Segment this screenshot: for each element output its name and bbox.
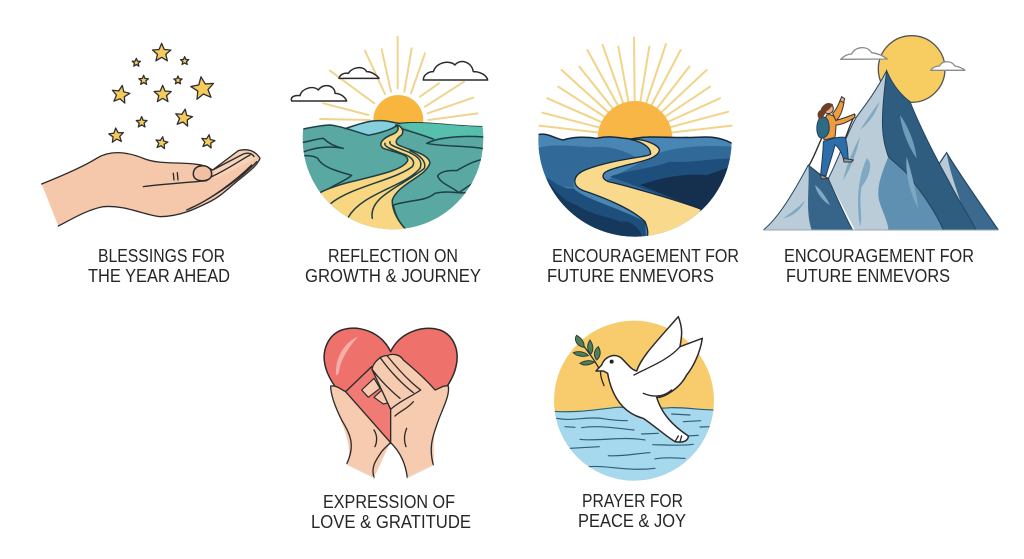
main peak xyxy=(828,71,976,230)
label: ENCOURAGEMENT FOR xyxy=(552,246,739,266)
panel: encouragement for future endeavors (climber) xyxy=(763,36,998,286)
right hand xyxy=(372,354,449,478)
clouds xyxy=(291,62,488,101)
sun xyxy=(373,95,423,145)
label: EXPRESSION OF xyxy=(323,492,455,512)
centre heart panel xyxy=(346,367,391,443)
left hand xyxy=(331,386,391,478)
label: FUTURE ENMEVORS xyxy=(786,266,950,286)
sun disc xyxy=(554,321,714,481)
icon: climber on mountain xyxy=(763,36,998,230)
label: REFLECTION ON xyxy=(328,246,458,266)
front peak xyxy=(763,165,998,230)
label xyxy=(547,246,739,286)
dove xyxy=(596,317,702,442)
label xyxy=(311,492,471,532)
winding road xyxy=(318,125,430,233)
label: PRAYER FOR xyxy=(582,491,683,511)
highlight xyxy=(336,337,358,375)
landscape xyxy=(298,121,488,233)
icon: hands holding heart xyxy=(324,328,457,478)
sun xyxy=(598,101,672,176)
label: ENCOURAGEMENT FOR xyxy=(784,246,974,266)
label: PEACE & JOY xyxy=(578,511,686,531)
climber xyxy=(809,97,855,179)
stars xyxy=(108,43,216,149)
sun rays xyxy=(320,37,478,120)
inner fingers xyxy=(362,378,389,404)
label xyxy=(578,491,686,531)
river landscape xyxy=(537,134,733,243)
clouds xyxy=(841,48,965,70)
back peak xyxy=(937,153,998,230)
hand xyxy=(42,150,260,226)
label: BLESSINGS FOR xyxy=(98,246,225,266)
label: LOVE & GRATITUDE xyxy=(311,512,471,532)
sun rays xyxy=(539,37,732,133)
water xyxy=(554,406,714,481)
label xyxy=(305,246,481,286)
panel: encouragement for future endeavors (river) xyxy=(537,37,739,286)
icon: sunrise landscape with winding road xyxy=(291,37,488,233)
panel: prayer for peace and joy xyxy=(550,317,717,531)
panel: expression of love and gratitude xyxy=(311,328,471,532)
label xyxy=(784,246,974,286)
icon: open hand with falling stars xyxy=(42,43,260,226)
panel: blessings for the year ahead xyxy=(42,43,260,286)
heart xyxy=(324,328,457,443)
wrist fade xyxy=(346,464,433,478)
sun xyxy=(878,36,945,102)
olive branch xyxy=(573,335,604,386)
panel: reflection on growth and journey xyxy=(291,37,488,286)
label: FUTURE ENMEVORS xyxy=(547,266,714,286)
icon: dove over water xyxy=(550,317,717,487)
label xyxy=(88,246,230,286)
label: THE YEAR AHEAD xyxy=(88,266,230,286)
label: GROWTH & JOURNEY xyxy=(305,266,481,286)
icon: sunrise over river xyxy=(537,37,733,243)
